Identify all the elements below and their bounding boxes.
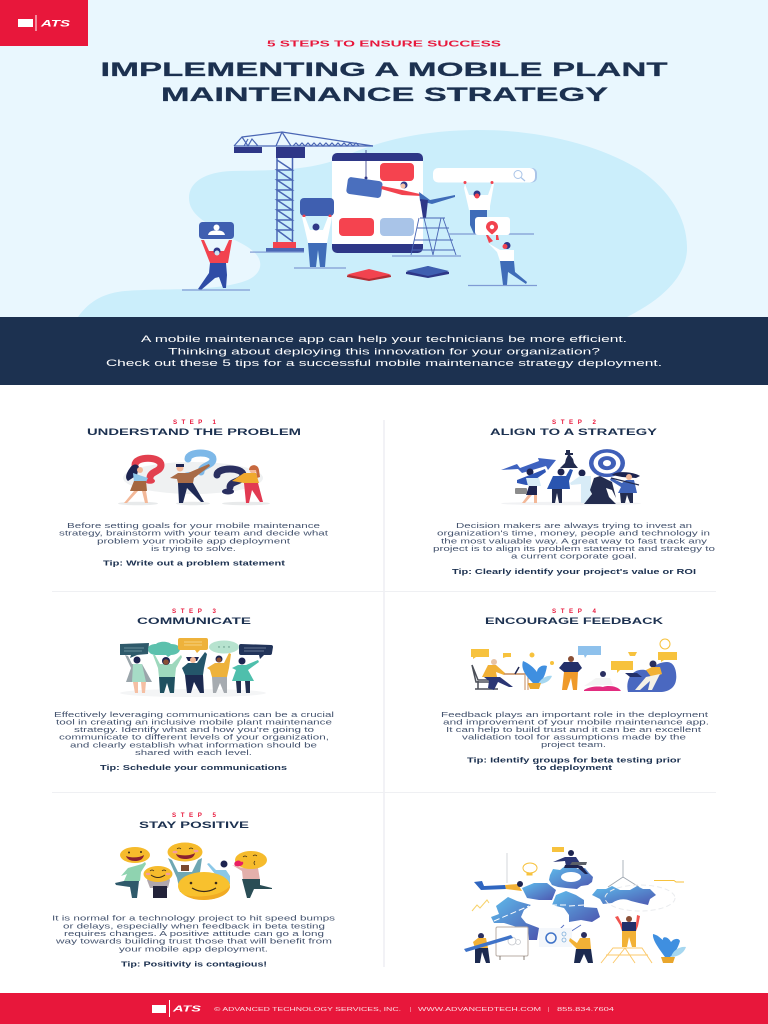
crane [234, 132, 373, 253]
step 4 body text [441, 711, 709, 749]
illustration: people with emoji faces [115, 842, 272, 900]
step 5 body text: or delays, especially when feedback in beta testing [63, 922, 325, 930]
panel: step 4: ENCOURAGE FEEDBACK [485, 616, 664, 626]
hero illustration: mobile app construction [182, 132, 537, 290]
panel: intro band: Thinking about deploying this innovation for your organization? [168, 346, 600, 356]
illustration: strategy team with chess pieces [501, 449, 641, 505]
emoji 4 [234, 851, 267, 869]
panel: intro band: A mobile maintenance app can help your technicians be more efficient. [141, 333, 627, 344]
beanbag with man on laptop [625, 660, 676, 692]
panel: step 5: STAY POSITIVE [139, 820, 249, 830]
person green shirt [115, 862, 146, 898]
step 1 body text: problem your mobile app deployment [97, 538, 290, 546]
panel: step 2 [433, 419, 715, 576]
worker holding profile card [182, 222, 250, 290]
step 3 body text: strategy. Identify what and how you're going to [74, 726, 314, 734]
step 4 tip [467, 757, 681, 772]
step 1 body text: Before setting goals for your mobile maintenance [67, 522, 320, 530]
person 4 [207, 653, 231, 693]
emoji 3 [144, 866, 172, 882]
step 2 body text: organization's time, money, people and technology in [437, 530, 710, 538]
person teal shirt [168, 858, 202, 892]
step 1 body text: is trying to solve. [151, 545, 236, 553]
lying woman [474, 853, 523, 891]
step 5 body text: requires changes. A positive attitude can go a long [64, 930, 324, 938]
step 4 tip: to deployment [536, 764, 613, 772]
step 3 body text: tool in creating an inclusive mobile plant maintenance [56, 718, 332, 726]
step 2 body text [433, 522, 715, 560]
person 3 [182, 652, 207, 693]
woman on gear [552, 847, 588, 874]
step 1 body text: strategy, brainstorm with your team and decide what [59, 530, 328, 538]
title: IMPLEMENTING A MOBILE PLANT [100, 60, 668, 81]
illustration: team with speech bubbles [120, 638, 273, 697]
step 4 body text: It can help to build trust and it can be an excellent [446, 726, 701, 734]
worker holding blue block [294, 198, 346, 268]
panel: step 2: STEP 2 [552, 419, 597, 426]
emoji 1 [120, 847, 150, 863]
panel: intro band [0, 317, 768, 385]
step 3 body text: and clearly establish what information should be [70, 741, 317, 749]
footer contact line: © ADVANCED TECHNOLOGY SERVICES, INC. [214, 1006, 402, 1013]
panel: step 5: STEP 5 [172, 812, 217, 819]
step 1 body text [59, 522, 328, 553]
panel: step 5 [52, 812, 336, 969]
illustration: team assembling gears [464, 847, 686, 963]
panel: step 3: STEP 3 [172, 608, 217, 615]
person blue top [207, 860, 230, 884]
person 5 [232, 658, 259, 693]
step 4 tip: Tip: Identify groups for beta testing prior [467, 757, 681, 765]
panel: step 1 [59, 419, 328, 568]
man on scaffold [601, 915, 652, 963]
panel: step 3: COMMUNICATE [137, 616, 251, 626]
person 2 [153, 655, 182, 693]
step 5 body text: way towards building trust those that will benefit from [54, 938, 332, 946]
step 2 tip: Tip: Clearly identify your project's value or ROI [452, 568, 696, 576]
worker on ladder [381, 182, 455, 218]
step 1 tip: Tip: Write out a problem statement [103, 560, 286, 568]
hanging gear segment [592, 860, 675, 911]
footer contact line [214, 1006, 615, 1013]
step 3 body text: communicate to different levels of your organization, [59, 734, 329, 742]
illustration: people with question marks [118, 453, 270, 505]
footer contact line: | [410, 1007, 411, 1013]
title [100, 60, 668, 106]
footer contact line: | [548, 1007, 550, 1013]
step 4 body text: project team. [541, 741, 606, 749]
logo: ATS top badge: ATS [39, 18, 71, 30]
meditating woman [584, 671, 621, 691]
location pin card [475, 217, 510, 235]
step 2 body text: Decision makers are always trying to invest an [456, 522, 692, 530]
person grey top [147, 876, 170, 898]
step 3 body text: shared with each level. [135, 749, 252, 757]
person pink top [232, 865, 272, 898]
panel: hero background [0, 0, 768, 317]
logo: ATS footer: ATS [171, 1004, 202, 1014]
logo: ATS footer [152, 1000, 202, 1017]
eyebrow heading: 5 STEPS TO ENSURE SUCCESS [267, 39, 502, 48]
chart sheet [539, 928, 572, 947]
loose tiles [347, 266, 449, 281]
worker holding pin [468, 235, 537, 286]
step 5 body text: your mobile app deployment. [119, 946, 268, 954]
plant [522, 661, 552, 689]
panel: step 4 [441, 608, 709, 772]
man with tablet [569, 932, 593, 963]
man with pencil [464, 933, 513, 963]
footer contact line: WWW.ADVANCEDTECH.COM [418, 1007, 541, 1013]
step 3 body text: Effectively leveraging communications can be a crucial [54, 711, 335, 719]
step 5 body text: It is normal for a technology project to hit speed bumps [52, 915, 336, 923]
logo: ATS top badge [0, 0, 88, 46]
panel: step 1: UNDERSTAND THE PROBLEM [87, 427, 301, 437]
step 2 body text: the most valuable way. A great way to fast track any [441, 538, 708, 546]
step 5 body text [52, 915, 336, 954]
emoji 2 [168, 842, 202, 862]
phone [332, 153, 423, 253]
title: MAINTENANCE STRATEGY [161, 85, 609, 106]
top gear [549, 866, 593, 889]
step 2 body text: a current corporate goal. [511, 552, 637, 560]
standing man [559, 656, 582, 690]
step 4 body text: validation tool for assumptions made by the [462, 734, 686, 742]
seated worker at desk [472, 659, 531, 690]
gear segments [491, 883, 600, 940]
panel: intro band: Check out these 5 tips for a successful mobile maintenance strategy deployment. [106, 357, 662, 368]
whiteboard [496, 927, 528, 960]
panel: step 4: STEP 4 [552, 608, 597, 615]
emoji 5 [178, 872, 230, 900]
panel: step 2: ALIGN TO A STRATEGY [490, 427, 657, 437]
ladder [392, 218, 461, 256]
step 4 body text: Feedback plays an important role in the deployment [441, 711, 708, 719]
step 3 tip: Tip: Schedule your communications [100, 764, 287, 772]
hanging block [346, 150, 383, 198]
illustration: feedback in the workplace [471, 639, 677, 692]
step 5 tip: Tip: Positivity is contagious! [121, 961, 267, 969]
light bulb [523, 863, 537, 875]
panel: step 1: STEP 1 [173, 419, 217, 426]
panel: step 3 [54, 608, 335, 772]
step 3 body text [54, 711, 335, 757]
step 4 body text: and improvement of your mobile maintenance app. [443, 718, 709, 726]
panel: footer [0, 993, 768, 1024]
person 1 [125, 655, 152, 693]
potted plant [653, 934, 686, 963]
footer contact line: 855.834.7604 [557, 1007, 615, 1013]
worker holding search bar [448, 184, 534, 234]
search bar [433, 168, 537, 184]
yellow accents [472, 880, 684, 911]
step 2 body text: project is to align its problem statement and strategy to [433, 545, 715, 553]
